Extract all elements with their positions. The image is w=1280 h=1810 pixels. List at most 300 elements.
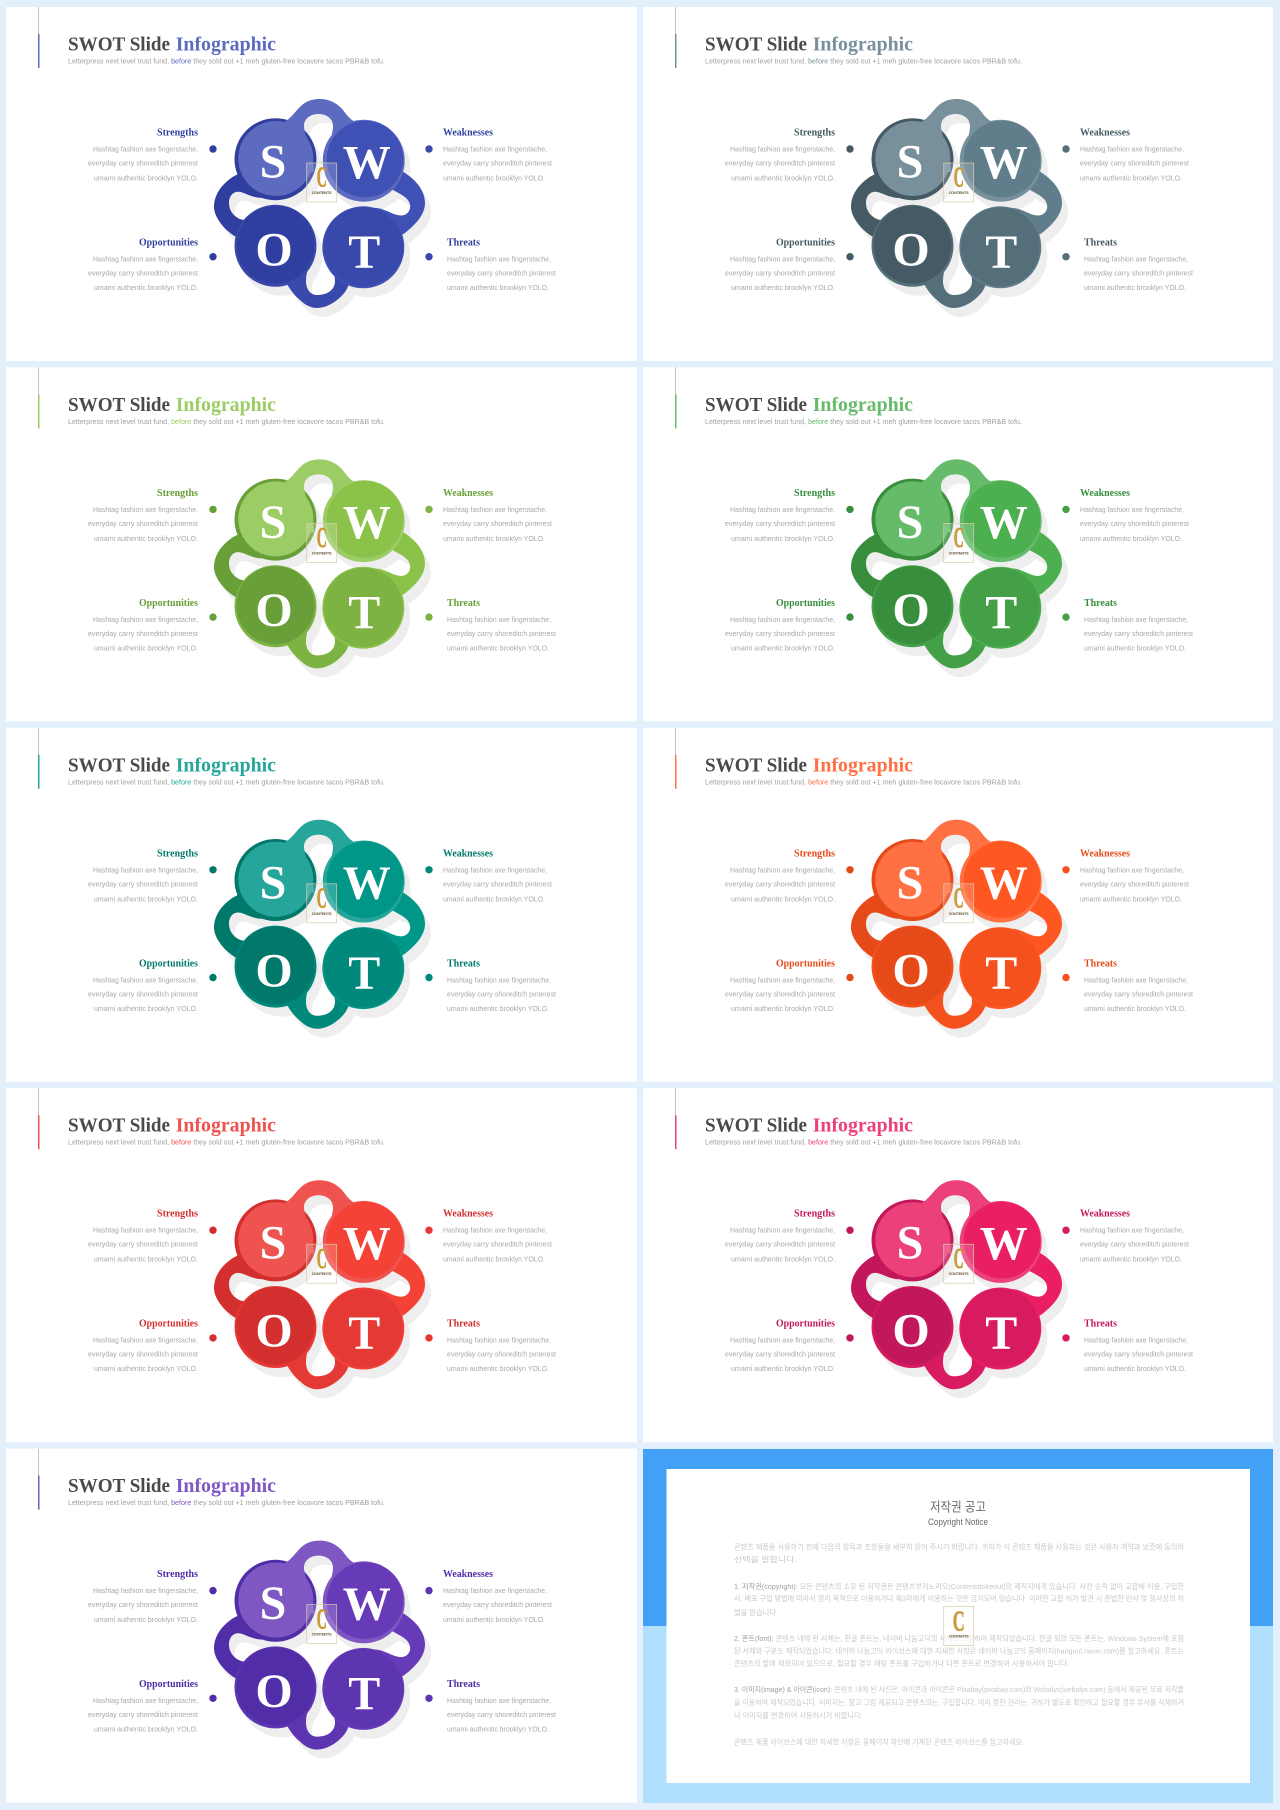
circle S: S [260, 136, 286, 188]
threats block [1062, 958, 1193, 1013]
title: Infographic [176, 1475, 276, 1497]
title: Infographic [813, 1115, 913, 1137]
connecting lobes [214, 1541, 425, 1750]
threats block: umami authentic brooklyn YOLO. [1084, 1004, 1186, 1013]
strengths block: Hashtag fashion axe fingerstache, [93, 505, 198, 514]
panel: pink SWOT slide [643, 1088, 1273, 1442]
weaknesses block: everyday carry shoreditch pinterest [1080, 519, 1189, 528]
opportunities block [88, 1319, 217, 1373]
opportunities block: Hashtag fashion axe fingerstache, [93, 615, 198, 624]
connecting lobes [214, 99, 425, 308]
weaknesses block: Hashtag fashion axe fingerstache, [443, 505, 547, 514]
strengths block [88, 1569, 217, 1624]
title: SWOT Slide [705, 1115, 807, 1137]
strengths block: umami authentic brooklyn YOLO. [731, 174, 835, 182]
circle W [323, 120, 405, 202]
opportunities block: Opportunities [139, 958, 198, 969]
watermark: CONTENTS [949, 190, 969, 195]
blue frame [643, 1449, 1273, 1803]
opportunities block [88, 598, 217, 652]
opportunities block: umami authentic brooklyn YOLO. [94, 643, 198, 652]
SWOT flower diagram [851, 1180, 1068, 1398]
threats block: Threats [447, 238, 480, 248]
opportunities block: Opportunities [139, 1679, 198, 1690]
strengths block [88, 848, 217, 903]
opportunities block: everyday carry shoreditch pinterest [88, 1350, 198, 1359]
title [68, 754, 276, 776]
opportunities block [88, 1679, 217, 1734]
threats block [425, 1679, 556, 1734]
watermark: C [954, 523, 964, 554]
weaknesses block: umami authentic brooklyn YOLO. [443, 534, 545, 543]
panel: blue grey SWOT slide [643, 7, 1273, 361]
section 1 copyright: 사, 배포 구입 방법에 따라서 영리 목적으로 이용하거나 제3자에게 이용하는 것은 금지되어 있습니다. 이러한 교합 허가 발견 시 준법한 민사 및 형사상의 처 [734, 1593, 1184, 1603]
threats block: everyday carry shoreditch pinterest [1084, 989, 1193, 998]
circle W: W [343, 1578, 391, 1631]
section 1 copyright: 벌을 받습니다. [734, 1607, 778, 1617]
subtitle: Letterpress next level trust fund, before they sold out +1 meh gluten-free locavore tacos PBR&B tofu. [68, 417, 385, 426]
threats block [425, 1319, 556, 1373]
threats block: Hashtag fashion axe fingerstache, [447, 975, 551, 984]
circle O: O [255, 1305, 293, 1358]
watermark [944, 1244, 974, 1283]
weaknesses block: Weaknesses [1080, 848, 1130, 859]
subtitle: Letterpress next level trust fund, before they sold out +1 meh gluten-free locavore tacos PBR&B tofu. [68, 1498, 385, 1507]
weaknesses block: umami authentic brooklyn YOLO. [1080, 894, 1182, 903]
weaknesses block [425, 488, 552, 543]
circle W [323, 1201, 405, 1283]
panel background [6, 7, 637, 361]
SWOT flower diagram [851, 99, 1068, 317]
intro paragraph: 콘텐츠 제품을 사용하기 전에 다음의 항목과 조항들을 세부히 읽어 주시기 바랍니다. 귀하가 이 콘텐츠 제품을 사용하는 것은 사용자 계약과 보증에 동의와 [734, 1542, 1184, 1552]
threats block [1062, 238, 1193, 292]
strengths block: everyday carry shoreditch pinterest [725, 879, 835, 888]
threats block: Hashtag fashion axe fingerstache, [447, 254, 551, 264]
circle T: T [985, 586, 1017, 639]
SWOT flower diagram [214, 820, 431, 1038]
circle T [959, 567, 1041, 649]
opportunities block: Hashtag fashion axe fingerstache, [93, 975, 198, 984]
circle O [234, 926, 316, 1008]
watermark: CONTENTS [312, 190, 332, 195]
accent line [675, 728, 676, 789]
circle S: S [897, 496, 923, 549]
watermark: CONTENTS [949, 550, 969, 555]
flower shadow [857, 1189, 1068, 1398]
strengths block [725, 1209, 854, 1264]
circle W: W [980, 136, 1028, 189]
panel background [6, 1449, 637, 1803]
flower shadow [857, 108, 1068, 317]
threats block: Hashtag fashion axe fingerstache, [1084, 254, 1188, 264]
opportunities block: umami authentic brooklyn YOLO. [731, 283, 835, 292]
flower shadow [220, 829, 431, 1038]
title [705, 1115, 913, 1137]
section 2 font: 콘텐츠의 팔에 제외되어 있으므로, 필요할 경우 해당 폰트를 구입하거나 다른 폰트로 변경하여 사용하셔야 합니다. [734, 1658, 1069, 1668]
weaknesses block: Weaknesses [443, 488, 493, 499]
title [68, 34, 276, 56]
threats block: everyday carry shoreditch pinterest [447, 989, 556, 998]
threats block: everyday carry shoreditch pinterest [447, 1350, 556, 1359]
circle T: T [985, 1307, 1017, 1360]
opportunities block: umami authentic brooklyn YOLO. [731, 1004, 835, 1013]
subtitle: Letterpress next level trust fund, before they sold out +1 meh gluten-free locavore tacos PBR&B tofu. [705, 417, 1022, 426]
S circle rim [872, 118, 954, 200]
threats block [425, 958, 556, 1013]
threats block: umami authentic brooklyn YOLO. [1084, 1364, 1186, 1373]
watermark [307, 884, 337, 923]
opportunities block: umami authentic brooklyn YOLO. [731, 1364, 835, 1373]
strengths block: Strengths [794, 128, 835, 138]
strengths block: umami authentic brooklyn YOLO. [731, 894, 835, 903]
circle W: W [343, 857, 391, 910]
title: Infographic [813, 394, 913, 416]
strengths block: Hashtag fashion axe fingerstache, [730, 865, 835, 874]
flower shadow [220, 108, 431, 317]
threats block: umami authentic brooklyn YOLO. [447, 643, 549, 652]
circle S: S [897, 856, 923, 909]
circle S: S [260, 856, 286, 909]
strengths block: Hashtag fashion axe fingerstache, [93, 1586, 198, 1595]
weaknesses block: umami authentic brooklyn YOLO. [443, 174, 545, 182]
weaknesses block: everyday carry shoreditch pinterest [443, 1600, 552, 1609]
weaknesses block: everyday carry shoreditch pinterest [443, 879, 552, 888]
threats block: everyday carry shoreditch pinterest [447, 268, 556, 278]
title [705, 394, 913, 416]
strengths block: umami authentic brooklyn YOLO. [94, 1615, 198, 1624]
title: SWOT Slide [705, 754, 807, 776]
strengths block [88, 1209, 217, 1264]
intro paragraph [734, 1542, 1184, 1564]
weaknesses block: Hashtag fashion axe fingerstache, [443, 1586, 547, 1595]
weaknesses block: everyday carry shoreditch pinterest [1080, 879, 1189, 888]
weaknesses block: Weaknesses [443, 1209, 493, 1220]
strengths block: umami authentic brooklyn YOLO. [94, 534, 198, 543]
opportunities block: Opportunities [776, 958, 835, 969]
circle T [959, 206, 1041, 288]
accent line [38, 1449, 40, 1510]
threats block: umami authentic brooklyn YOLO. [447, 1004, 549, 1013]
panel: green SWOT slide [643, 367, 1273, 721]
opportunities block: Hashtag fashion axe fingerstache, [730, 975, 835, 984]
threats block: umami authentic brooklyn YOLO. [447, 1364, 549, 1373]
strengths block [88, 488, 217, 543]
accent line [675, 7, 676, 68]
weaknesses block [425, 1569, 552, 1624]
watermark: CONTENTS [312, 1271, 332, 1276]
title: SWOT Slide [68, 34, 170, 56]
subtitle: Letterpress next level trust fund, before they sold out +1 meh gluten-free locavore tacos PBR&B tofu. [68, 1138, 385, 1147]
weaknesses block: Weaknesses [443, 128, 493, 138]
circle W [960, 480, 1042, 562]
circle T: T [348, 586, 380, 639]
opportunities block: Hashtag fashion axe fingerstache, [93, 1696, 198, 1705]
S circle rim [872, 1199, 954, 1281]
threats block [425, 598, 556, 652]
weaknesses block: Hashtag fashion axe fingerstache, [1080, 505, 1184, 514]
circle O [234, 1286, 316, 1368]
circle S [238, 1563, 313, 1638]
opportunities block: everyday carry shoreditch pinterest [88, 989, 198, 998]
S circle rim [234, 1560, 316, 1642]
circle T: T [348, 1668, 380, 1721]
subtitle: Letterpress next level trust fund, before they sold out +1 meh gluten-free locavore tacos PBR&B tofu. [68, 56, 385, 66]
strengths block: Strengths [157, 488, 198, 499]
opportunities block: everyday carry shoreditch pinterest [88, 629, 198, 638]
connecting lobes [214, 459, 425, 668]
threats block [1062, 1319, 1193, 1373]
connecting lobes [851, 820, 1062, 1029]
subtitle: Letterpress next level trust fund, before they sold out +1 meh gluten-free locavore tacos PBR&B tofu. [705, 1138, 1022, 1147]
opportunities block: everyday carry shoreditch pinterest [725, 629, 835, 638]
flower shadow [220, 1189, 431, 1398]
opportunities block: Opportunities [776, 598, 835, 609]
threats block: Threats [1084, 958, 1117, 969]
panel background [6, 728, 637, 1082]
flower shadow [857, 468, 1068, 677]
title: Infographic [176, 754, 276, 776]
circle T [322, 567, 404, 649]
intro paragraph: 선택을 말합니다. [734, 1554, 797, 1564]
circle O [872, 565, 954, 647]
title [68, 1115, 276, 1137]
circle O: O [892, 224, 930, 276]
opportunities block: Hashtag fashion axe fingerstache, [730, 1336, 835, 1345]
section 2 font [734, 1633, 1184, 1668]
accent line [38, 1088, 40, 1149]
watermark: C [317, 163, 327, 194]
opportunities block: everyday carry shoreditch pinterest [88, 268, 198, 278]
notice heading: 저작권 공고 [930, 1500, 986, 1514]
strengths block: Hashtag fashion axe fingerstache, [730, 1226, 835, 1235]
circle O [234, 205, 316, 287]
title: SWOT Slide [68, 1475, 170, 1497]
weaknesses block [425, 1209, 552, 1264]
threats block: Threats [447, 1319, 480, 1330]
panel: red SWOT slide [6, 1088, 637, 1442]
strengths block [725, 848, 854, 903]
opportunities block: umami authentic brooklyn YOLO. [94, 1364, 198, 1373]
opportunities block: everyday carry shoreditch pinterest [725, 989, 835, 998]
circle T [959, 1288, 1041, 1370]
watermark [307, 1244, 337, 1283]
circle O: O [255, 944, 293, 997]
threats block: Threats [1084, 1319, 1117, 1330]
SWOT flower diagram [214, 459, 431, 677]
panel background [643, 367, 1273, 721]
flower shadow [220, 1550, 431, 1759]
strengths block: everyday carry shoreditch pinterest [725, 158, 835, 168]
watermark: CONTENTS [312, 550, 332, 555]
circle T [322, 1288, 404, 1370]
strengths block: Hashtag fashion axe fingerstache, [93, 865, 198, 874]
circle S [238, 1202, 313, 1277]
circle O: O [892, 944, 930, 997]
panel background [643, 728, 1273, 1082]
notice subheading: Copyright Notice [928, 1517, 988, 1527]
circle W [960, 120, 1042, 202]
title: SWOT Slide [705, 34, 807, 56]
panel background [643, 7, 1273, 361]
circle T [322, 206, 404, 288]
connecting lobes [851, 1180, 1062, 1389]
strengths block: umami authentic brooklyn YOLO. [94, 174, 198, 182]
white notice sheet [666, 1469, 1250, 1783]
threats block: everyday carry shoreditch pinterest [1084, 268, 1193, 278]
opportunities block: umami authentic brooklyn YOLO. [94, 1004, 198, 1013]
strengths block: everyday carry shoreditch pinterest [88, 1240, 198, 1249]
threats block [425, 238, 556, 292]
circle S: S [260, 1577, 286, 1630]
threats block: umami authentic brooklyn YOLO. [1084, 643, 1186, 652]
weaknesses block [1062, 488, 1189, 543]
threats block: Hashtag fashion axe fingerstache, [1084, 975, 1188, 984]
weaknesses block: Hashtag fashion axe fingerstache, [443, 865, 547, 874]
watermark: CONTENTS [312, 911, 332, 916]
weaknesses block: Weaknesses [443, 1569, 493, 1580]
circle S [238, 842, 313, 917]
strengths block [725, 488, 854, 543]
section 2 font: 된 서체와 구분도 제작되었습니다. 네이버 나눔고딕 라이선스에 대한 자세한 사항은 네이버 나눔고딕 홈페이지(hangeul.naver.com)를 참고하세요. 폰트는 [734, 1646, 1184, 1656]
threats block: Hashtag fashion axe fingerstache, [447, 1336, 551, 1345]
watermark: CONTENTS [949, 911, 969, 916]
title [705, 754, 913, 776]
strengths block: Strengths [157, 128, 198, 138]
watermark: C [954, 163, 964, 194]
flower shadow [857, 829, 1068, 1038]
connecting lobes [214, 1180, 425, 1389]
title [68, 394, 276, 416]
accent line [38, 728, 40, 789]
weaknesses block: everyday carry shoreditch pinterest [1080, 158, 1189, 168]
opportunities block: Opportunities [139, 238, 198, 248]
opportunities block: Opportunities [139, 598, 198, 609]
opportunities block: Opportunities [776, 238, 835, 248]
panel: copyright notice [643, 1449, 1273, 1803]
circle S: S [897, 1217, 923, 1270]
S circle rim [234, 479, 316, 561]
panel background [6, 367, 637, 721]
panel background [643, 1088, 1273, 1442]
strengths block: Strengths [157, 1569, 198, 1580]
subtitle: Letterpress next level trust fund, before they sold out +1 meh gluten-free locavore tacos PBR&B tofu. [68, 777, 385, 786]
threats block: Hashtag fashion axe fingerstache, [1084, 1336, 1188, 1345]
weaknesses block: Hashtag fashion axe fingerstache, [1080, 865, 1184, 874]
strengths block: Hashtag fashion axe fingerstache, [93, 1226, 198, 1235]
strengths block: everyday carry shoreditch pinterest [88, 158, 198, 168]
circle O: O [255, 224, 293, 276]
strengths block: everyday carry shoreditch pinterest [88, 879, 198, 888]
threats block: Threats [1084, 238, 1117, 248]
circle W: W [343, 1217, 391, 1270]
threats block [1062, 598, 1193, 652]
threats block: Hashtag fashion axe fingerstache, [447, 1696, 551, 1705]
flower shadow [220, 468, 431, 677]
circle S [238, 481, 313, 556]
accent line [38, 367, 40, 428]
weaknesses block: everyday carry shoreditch pinterest [443, 158, 552, 168]
opportunities block: Opportunities [139, 1319, 198, 1330]
strengths block: Hashtag fashion axe fingerstache, [730, 505, 835, 514]
circle W [960, 840, 1042, 922]
S circle rim [234, 118, 316, 200]
circle W [960, 1201, 1042, 1283]
strengths block: umami authentic brooklyn YOLO. [94, 1255, 198, 1264]
circle T: T [985, 947, 1017, 1000]
strengths block: Strengths [157, 848, 198, 859]
circle S [875, 121, 950, 196]
circle W [323, 1561, 405, 1643]
threats block: umami authentic brooklyn YOLO. [1084, 283, 1186, 292]
circle O [872, 205, 954, 287]
closing paragraph: 콘텐츠 제품 라이선스에 대한 자세한 사항은 홈페이지 하단에 기재된 콘텐츠 라이선스를 참고하세요. [734, 1736, 1024, 1746]
circle O [872, 1286, 954, 1368]
weaknesses block [1062, 848, 1189, 903]
title: Infographic [176, 394, 276, 416]
SWOT flower diagram [214, 99, 431, 317]
circle S: S [897, 136, 923, 188]
circle O: O [255, 1665, 293, 1718]
SWOT flower diagram [214, 1180, 431, 1398]
title: SWOT Slide [68, 754, 170, 776]
section 3 image and icon: 3. 이미지(image) & 아이콘(icon): 콘텐츠 내에 된 사진은, 아이콘과 아이콘은 Pixabay(pixabay.com)와 Webalys(webalys.com) 등에서 제공된 무료 저작물 [734, 1684, 1184, 1694]
S circle rim [234, 1199, 316, 1281]
circle W: W [980, 497, 1028, 550]
circle S: S [260, 1217, 286, 1270]
section 3 image and icon: 을 이용하여 제작되었습니다. 이미지는, 참고 그림 제공되고 콘텐츠의는, 구입합니다. 미리 정한 건리는, 귀하가 별도로 확인하고 필요할 경우 유사를 삭제하거 [734, 1697, 1184, 1707]
weaknesses block: umami authentic brooklyn YOLO. [1080, 174, 1182, 182]
threats block: Hashtag fashion axe fingerstache, [447, 615, 551, 624]
circle O [234, 1646, 316, 1728]
opportunities block [88, 958, 217, 1013]
section 1 copyright [734, 1581, 1184, 1617]
opportunities block: everyday carry shoreditch pinterest [725, 1350, 835, 1359]
weaknesses block: everyday carry shoreditch pinterest [443, 1240, 552, 1249]
subtitle: Letterpress next level trust fund, before they sold out +1 meh gluten-free locavore tacos PBR&B tofu. [705, 56, 1022, 66]
strengths block: everyday carry shoreditch pinterest [725, 519, 835, 528]
weaknesses block: umami authentic brooklyn YOLO. [443, 1255, 545, 1264]
circle S [875, 481, 950, 556]
circle T: T [348, 947, 380, 1000]
weaknesses block: umami authentic brooklyn YOLO. [1080, 534, 1182, 543]
opportunities block: umami authentic brooklyn YOLO. [731, 643, 835, 652]
circle T: T [348, 1307, 380, 1360]
weaknesses block: Weaknesses [1080, 488, 1130, 499]
threats block: Threats [447, 958, 480, 969]
SWOT flower diagram [851, 459, 1068, 677]
weaknesses block: everyday carry shoreditch pinterest [1080, 1240, 1189, 1249]
opportunities block [725, 1319, 854, 1373]
watermark [307, 523, 337, 562]
weaknesses block [425, 128, 552, 182]
strengths block: Strengths [794, 848, 835, 859]
opportunities block [725, 598, 854, 652]
watermark: C [317, 1244, 327, 1275]
accent line [38, 7, 40, 68]
weaknesses block [1062, 128, 1189, 182]
connecting lobes [214, 820, 425, 1029]
watermark: CONTENTS [949, 1634, 969, 1639]
panel: deep purple SWOT slide [6, 1449, 637, 1803]
threats block: Hashtag fashion axe fingerstache, [1084, 615, 1188, 624]
weaknesses block: Weaknesses [443, 848, 493, 859]
circle S [875, 842, 950, 917]
panel: indigo SWOT slide [6, 7, 637, 361]
threats block: umami authentic brooklyn YOLO. [447, 1725, 549, 1734]
circle S [875, 1202, 950, 1277]
panel background [6, 1088, 637, 1442]
weaknesses block: Hashtag fashion axe fingerstache, [443, 1226, 547, 1235]
